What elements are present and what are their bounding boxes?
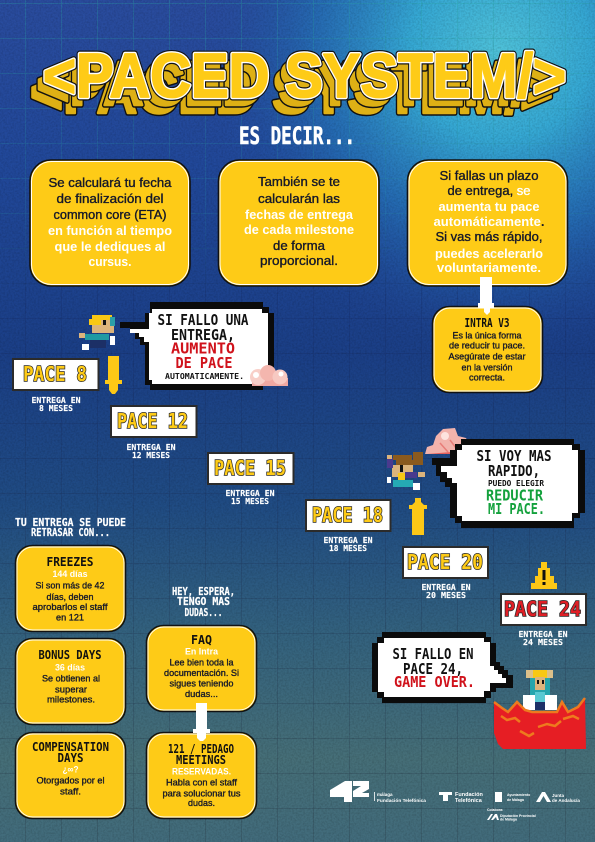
panel: compensation days: staff. — [60, 786, 81, 798]
panel: ETA card: en función al tiempo — [48, 224, 172, 238]
panel: milestone dates card: de forma — [273, 239, 325, 253]
panel: intra v3 card — [432, 306, 542, 392]
panel: missed deadline card: de entrega, se — [448, 184, 531, 198]
pace step: 15: ENTREGA EN — [226, 489, 275, 498]
panel: bonus days: BONUS DAYS — [38, 648, 102, 662]
speech bubble: missed delivery: ENTREGA, — [171, 326, 235, 344]
panel: 121 / pedago meetings: 121 / PEDAGO — [168, 742, 234, 756]
icon: flames — [494, 698, 586, 749]
title: <PACED SYSTEM/> — [36, 50, 560, 119]
speech bubble: going faster: SI VOY MAS — [476, 447, 552, 465]
logo: fundacion telefonica — [439, 792, 483, 804]
speech bubble: missed delivery: SI FALLO UNA — [158, 311, 248, 329]
subtitle: es decir: ES DECIR... — [239, 122, 355, 150]
icon: cloud left — [250, 365, 288, 386]
logo: diputacion de malaga — [487, 808, 536, 822]
pace step: 12: ENTREGA EN — [126, 443, 176, 452]
panel: freezes: Si son más de 42 — [36, 580, 104, 592]
pace step: 8: 8 MESES — [39, 404, 73, 413]
pace step: 24: 24 MESES — [523, 638, 563, 647]
pace step: 20: 20 MESES — [426, 591, 466, 600]
panel: faq: sigues teniendo — [170, 678, 234, 690]
arrow: card to intra — [478, 277, 494, 315]
panel: ETA card: cursus. — [88, 255, 132, 269]
arrow: up — [409, 498, 427, 535]
logo: junta de andalucia: de Andalucía — [552, 798, 580, 803]
title: <PACED SYSTEM/> — [30, 58, 553, 127]
title: <PACED SYSTEM/> — [36, 50, 560, 119]
pace step: 18: 18 MESES — [329, 544, 367, 553]
heading: more doubts: DUDAS... — [184, 607, 222, 619]
speech bubble: game over: GAME OVER. — [394, 673, 475, 691]
character: running boy — [79, 315, 115, 350]
speech bubble: going faster — [432, 439, 585, 528]
heading: more doubts: TENGO MAS — [177, 596, 230, 608]
panel: faq: FAQ — [191, 633, 212, 647]
panel: compensation days: ¿∞? — [62, 764, 79, 776]
panel: faq: dudas... — [185, 689, 218, 700]
logo: ayuntamiento de malaga: de Málaga — [507, 798, 524, 802]
panel: ETA card: de finalización del — [56, 192, 164, 206]
pace step: 24 — [501, 594, 586, 647]
speech bubble: going faster: RAPIDO, — [488, 462, 540, 480]
heading: delivery delay: TU ENTREGA SE PUEDE — [15, 517, 126, 529]
pace step: 15 — [208, 453, 294, 506]
panel: 121 / pedago meetings: MEETINGS — [176, 753, 226, 767]
panel: missed deadline card — [408, 160, 568, 286]
speech bubble: missed delivery: AUMENTO — [171, 340, 235, 358]
pace step: 20: ENTREGA EN — [422, 583, 471, 592]
panel: freezes: aprobarlos el staff — [32, 602, 108, 613]
panel: bonus days: 36 días — [55, 662, 85, 674]
heading: delivery delay: RETRASAR CON... — [31, 527, 110, 539]
logo: fundacion telefonica: Telefónica — [455, 798, 483, 804]
panel: bonus days: superar — [55, 684, 88, 696]
panel: 121 / pedago meetings: dudas. — [188, 798, 215, 809]
panel: intra v3 card: correcta. — [469, 372, 505, 384]
pace step: 8 — [13, 359, 98, 413]
logo: junta de andalucia: Junta — [552, 793, 564, 798]
panel: freezes: días, deben — [46, 592, 94, 603]
pace step: 15: 15 MESES — [231, 497, 269, 506]
pace step: 12: 12 MESES — [132, 451, 170, 460]
panel: compensation days: Otorgados por el — [36, 776, 104, 786]
logo: diputacion de malaga: Colabora: — [487, 808, 503, 812]
panel: 121 / pedago meetings: para solucionar tus — [162, 788, 241, 800]
arrow: down — [105, 356, 122, 394]
pace step: 8: ENTREGA EN — [32, 396, 81, 405]
arrow: faq to meetings — [193, 703, 210, 741]
title: <PACED SYSTEM/> — [30, 58, 553, 127]
speech bubble: game over — [372, 632, 513, 703]
speech bubble: game over: SI FALLO EN — [392, 645, 474, 663]
panel: faq — [146, 626, 256, 712]
panel: 121 / pedago meetings: Habla con el staff — [166, 778, 237, 788]
pace step: 20 — [403, 547, 488, 600]
panel: milestone dates card: de cada milestone — [244, 223, 354, 237]
pace step: 8: PACE 8 — [23, 362, 87, 386]
panel: missed deadline card: Si vas más rápido, — [436, 230, 542, 244]
speech bubble: going faster: REDUCIR — [486, 486, 544, 504]
heading: delivery delay — [15, 517, 126, 539]
panel: faq: Lee bien toda la — [170, 658, 234, 668]
panel: missed deadline card: puedes acelerarlo — [435, 247, 543, 261]
character: boy in flames — [523, 670, 557, 710]
panel: ETA card: que le dediques al — [54, 240, 166, 254]
panel: freezes: 144 días — [52, 569, 88, 580]
panel: milestone dates card: También se te — [258, 175, 340, 189]
pace step: 18: PACE 18 — [312, 503, 383, 527]
logo: 42 malaga — [330, 781, 426, 804]
panel: intra v3 card: de reducir tu pace. — [449, 340, 525, 352]
panel: 121 / pedago meetings: RESERVADAS. — [172, 766, 231, 778]
logo: diputacion de malaga: Diputación Provincial — [500, 814, 536, 818]
panel: freezes — [16, 546, 126, 632]
logo: 42 malaga: Fundación Telefónica — [377, 798, 426, 804]
panel: milestone dates card: calcularán las — [258, 192, 340, 206]
panel: intra v3 card: Es la única forma — [452, 330, 522, 342]
icon: cloud right — [425, 428, 475, 454]
panel: milestone dates card — [218, 160, 379, 286]
heading: more doubts: HEY, ESPERA, — [172, 586, 235, 598]
panel: milestone dates card: fechas de entrega — [245, 208, 354, 222]
logo: junta de andalucia — [536, 792, 580, 803]
panel: missed deadline card: aumenta tu pace — [438, 200, 540, 214]
pace step: 24: PACE 24 — [504, 597, 581, 621]
panel: missed deadline card: automáticamente . — [434, 215, 544, 229]
pace step: 18: ENTREGA EN — [324, 536, 373, 545]
panel: bonus days — [16, 638, 126, 724]
panel: bonus days: milestones. — [47, 694, 95, 706]
heading: more doubts — [172, 586, 235, 619]
pace step: 15: PACE 15 — [214, 456, 286, 480]
panel: milestone dates card: proporcional. — [260, 254, 338, 268]
speech bubble: going faster: PUEDO ELEGIR — [488, 479, 544, 488]
pace step: 18 — [306, 500, 390, 553]
pace step: 12 — [111, 406, 196, 460]
logo: fundacion telefonica: Fundación — [455, 792, 483, 798]
speech bubble: missed delivery: AUTOMATICAMENTE. — [165, 372, 244, 381]
logo: ayuntamiento de malaga — [495, 792, 530, 802]
panel: intra v3 card: INTRA V3 — [464, 316, 510, 330]
pace step: 24: ENTREGA EN — [518, 630, 568, 639]
panel: missed deadline card: voluntariamente. — [437, 261, 541, 275]
panel: faq: En Intra — [185, 646, 219, 658]
panel: ETA card — [30, 160, 190, 286]
logo: ayuntamiento de malaga: Ayuntamiento — [507, 793, 530, 797]
panel: ETA card: common core (ETA) — [54, 208, 166, 222]
panel: bonus days: Se obtienen al — [42, 674, 100, 684]
speech bubble: game over: PACE 24, — [403, 660, 463, 678]
icon: warning triangle — [531, 562, 557, 589]
panel: freezes: FREEZES — [46, 555, 94, 569]
panel: faq: documentación. Si — [164, 668, 239, 679]
panel: ETA card: Se calculará tu fecha — [48, 176, 172, 190]
panel: intra v3 card: Asegúrate de estar — [448, 352, 526, 362]
speech bubble: going faster: MI PACE. — [488, 500, 545, 518]
panel: 121 / pedago meetings — [146, 732, 256, 818]
pace step: 12: PACE 12 — [117, 409, 188, 433]
panel: intra v3 card: en la versión — [462, 362, 512, 374]
panel: compensation days — [16, 732, 126, 818]
speech bubble: missed delivery — [120, 302, 274, 390]
logo: 42 malaga: málaga — [377, 792, 393, 797]
character: running girl — [387, 452, 425, 490]
panel: compensation days: DAYS — [58, 751, 84, 765]
panel: freezes: en 121 — [56, 612, 84, 624]
panel: missed deadline card: Si fallas un plazo — [440, 169, 539, 183]
panel: compensation days: COMPENSATION — [32, 740, 109, 754]
logo: diputacion de malaga: de Málaga — [500, 818, 517, 822]
speech bubble: missed delivery: DE PACE — [176, 354, 232, 372]
pace step: 20: PACE 20 — [407, 550, 483, 574]
